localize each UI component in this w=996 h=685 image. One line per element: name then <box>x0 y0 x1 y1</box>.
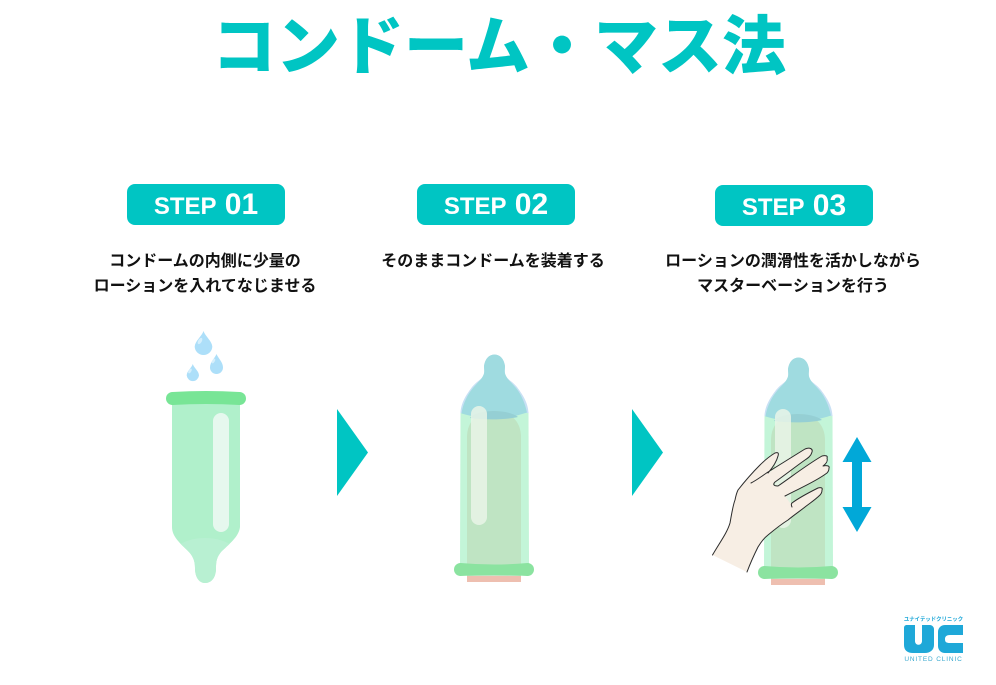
step 1 badge <box>127 184 285 225</box>
arrow: step 1 to 2 <box>337 409 368 496</box>
icon: up-down arrow <box>842 437 872 532</box>
step 3 caption: マスターベーションを行う <box>697 278 889 295</box>
step 1 badge: STEP 01 <box>154 188 258 221</box>
illustrations <box>166 331 963 661</box>
step 1 caption: コンドームの内側に少量の <box>109 253 301 270</box>
illustration: condom in use <box>758 358 838 585</box>
logo: United Clinic: UNITED CLINIC <box>904 656 963 663</box>
logo: United Clinic: ユナイテッドクリニック <box>904 615 963 623</box>
illustration: worn condom <box>454 354 534 582</box>
illustration: condom with lotion <box>165 391 246 594</box>
step 2 caption: そのままコンドームを装着する <box>381 253 605 270</box>
arrow: step 2 to 3 <box>632 409 663 496</box>
step 3 badge: STEP 03 <box>742 189 846 222</box>
icon: hand <box>712 448 829 572</box>
step 1 caption: ローションを入れてなじませる <box>94 278 316 295</box>
step 1 caption <box>94 252 316 295</box>
logo: United Clinic <box>904 615 963 663</box>
icon: lotion drops <box>187 331 223 381</box>
step 3 badge <box>715 185 873 226</box>
step 3 caption: ローションの潤滑性を活かしながら <box>665 253 921 270</box>
step 2 badge <box>417 184 575 225</box>
step 3 caption <box>665 252 921 295</box>
step 2 badge: STEP 02 <box>444 188 548 221</box>
